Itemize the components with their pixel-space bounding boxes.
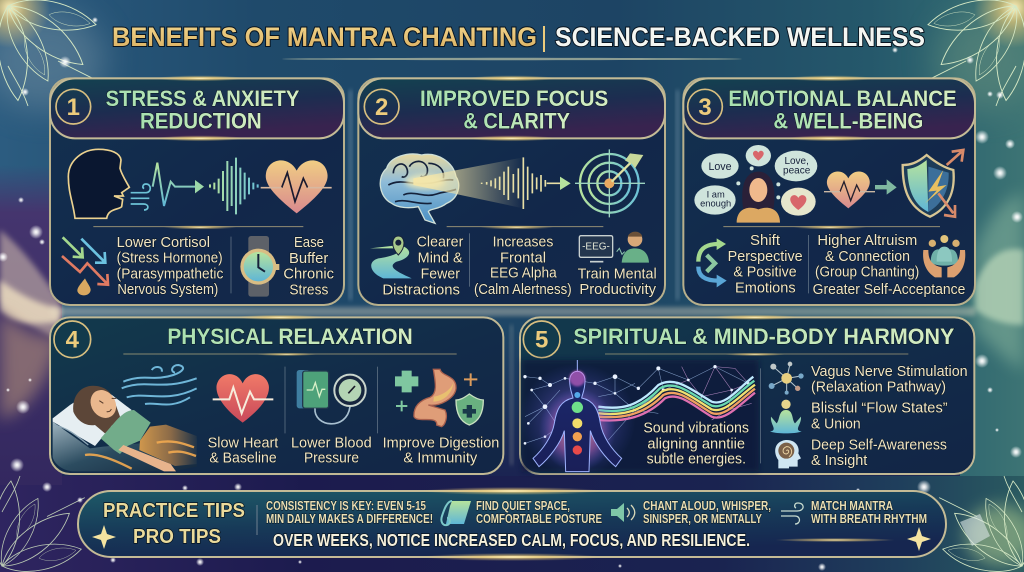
- icon: brain: [380, 154, 459, 223]
- panel 1: stress and anxiety reduction: [50, 75, 344, 305]
- badge: 4: [54, 321, 91, 358]
- tip: match mantra: WITH BREATH RHYTHM: [811, 511, 927, 526]
- caption: sound vibrations: subtle energies.: [647, 450, 746, 467]
- header: stress and anxiety reduction: [50, 75, 344, 141]
- text: increases frontal EEG alpha: (Calm Alertness): [474, 281, 572, 298]
- text: deep self-awareness: [811, 436, 947, 469]
- text: clearer mind: Mind &: [418, 250, 463, 267]
- icon: speaker: [611, 503, 635, 522]
- illustration: energy network: [519, 360, 758, 477]
- icon: breeze waves: [122, 365, 197, 405]
- decorative mandala: top left: [0, 0, 100, 106]
- icon: heart with pulse: [261, 160, 332, 213]
- text: shift perspective: Perspective: [728, 248, 803, 265]
- icon: meditating figure: [770, 400, 802, 433]
- text: increases frontal EEG alpha: Frontal: [500, 249, 546, 266]
- text: clearer mind: Distractions: [382, 281, 460, 298]
- text: lower cortisol: Lower Cortisol: [117, 234, 210, 251]
- panel: practice tips: [78, 487, 946, 561]
- caption: sound vibrations: [643, 420, 749, 467]
- icon: thought clouds: Love: [708, 161, 732, 173]
- heading: practice tips and pro tips: PRACTICE TIPS: [103, 500, 245, 522]
- panel 3: emotional balance and well-being: [683, 75, 975, 305]
- header: improved focus and clarity: 2: [375, 94, 388, 121]
- text: lower blood pressure: Pressure: [304, 450, 359, 467]
- text: vagus nerve stimulation: [811, 363, 968, 396]
- text: improve digestion and immunity: & Immunity: [403, 450, 478, 467]
- text: ease buffer chronic stress: Stress: [289, 281, 328, 298]
- header: improved focus and clarity: & CLARITY: [463, 108, 570, 133]
- tip: consistency: CONSISTENCY IS KEY: EVEN 5-15: [266, 498, 426, 513]
- header: emotional balance and well-being: EMOTIONAL BALANCE: [728, 86, 957, 111]
- badge: 5: 5: [535, 327, 548, 354]
- icon: descending arrows and cortisol drop: [62, 237, 108, 295]
- icon: digestion and immunity: [395, 369, 483, 427]
- icon: sound wave: [210, 158, 258, 214]
- text: deep self-awareness: Deep Self-Awareness: [811, 436, 947, 453]
- icon: yoga mat: [441, 501, 471, 525]
- icon: left sparkle: [92, 525, 116, 549]
- text: slow heart and baseline: Slow Heart: [208, 434, 279, 451]
- tip: quiet space: COMFORTABLE POSTURE: [476, 511, 602, 526]
- icon: EEG monitor: [579, 236, 613, 262]
- tip: consistency: [266, 498, 433, 526]
- text: blissful flow states: Blissful “Flow States”: [811, 400, 948, 417]
- icon: arrow: [875, 179, 897, 195]
- icon: focus beam: [405, 157, 523, 208]
- icon: breath wind: [781, 503, 803, 524]
- text: lower blood pressure: Lower Blood: [291, 434, 372, 451]
- icon: breath wind lines: [131, 184, 150, 210]
- header: stress and anxiety reduction: STRESS & ANXIETY: [106, 86, 300, 111]
- text: clearer mind: [382, 234, 463, 298]
- header: improved focus and clarity: [358, 75, 665, 141]
- icon: winding road with pin: [370, 236, 412, 278]
- text: shift perspective: & Positive: [733, 264, 797, 281]
- closing statement: OVER WEEKS, NOTICE INCREASED CALM, FOCUS, AND RESILIENCE.: [273, 530, 750, 550]
- text: blissful flow states: & Union: [811, 415, 861, 432]
- icon: thought clouds: enough: [700, 199, 731, 209]
- tip: consistency: MIN DAILY MAKES A DIFFERENCE!: [266, 511, 433, 526]
- text: shift perspective: Shift: [750, 232, 781, 249]
- icon: thought clouds: peace: [783, 165, 811, 176]
- heading: practice tips and pro tips: PRO TIPS: [133, 526, 221, 548]
- text: blissful flow states: [811, 400, 948, 432]
- icon: thought clouds: [694, 145, 817, 216]
- header: improved focus and clarity: IMPROVED FOCUS: [420, 86, 608, 111]
- text: higher altruism: Greater Self-Acceptance: [813, 281, 965, 298]
- text: higher altruism: & Connection: [825, 248, 910, 265]
- text: clearer mind: Clearer: [417, 234, 463, 251]
- heading: spiritual and mind-body harmony: SPIRITUAL & MIND-BODY HARMONY: [573, 324, 955, 349]
- text: slow heart and baseline: [208, 434, 279, 467]
- heading: practice tips and pro tips: [103, 500, 245, 548]
- text: vagus nerve stimulation: (Relaxation Pathway): [811, 379, 946, 396]
- icon: alpha wave: [482, 157, 563, 209]
- panel 2: improved focus and clarity: [358, 75, 665, 305]
- heading: physical relaxation: PHYSICAL RELAXATION: [167, 324, 413, 349]
- title: BENEFITS OF MANTRA CHANTING: [112, 22, 537, 52]
- tip: quiet space: [476, 498, 602, 526]
- text: increases frontal EEG alpha: Increases: [493, 234, 553, 251]
- text: lower cortisol: [117, 234, 224, 298]
- panel 4: physical relaxation: [50, 315, 503, 474]
- text: ease buffer chronic stress: Buffer: [289, 250, 328, 267]
- icon: blood pressure monitor: [297, 370, 366, 424]
- text: lower cortisol: (Parasympathetic: [117, 266, 224, 283]
- decorative mandala: bottom left: [0, 476, 85, 572]
- icon: thought clouds: Love,: [784, 156, 809, 167]
- tip: chant aloud: [643, 498, 771, 526]
- text: vagus nerve stimulation: Vagus Nerve Stimulation: [811, 363, 968, 380]
- icon: target: [575, 149, 645, 217]
- icon: shifting arrows: [698, 238, 727, 287]
- icon: vagus nerve nodes: [769, 362, 804, 395]
- tip: match mantra: [811, 498, 927, 526]
- text: lower cortisol: Nervous System): [117, 281, 218, 298]
- icon: heart rate: [213, 374, 273, 423]
- text: deep self-awareness: & Insight: [811, 452, 868, 469]
- text: ease buffer chronic stress: Chronic: [283, 266, 334, 283]
- icon: cracked shield: [903, 150, 963, 217]
- text: slow heart and baseline: & Baseline: [209, 450, 277, 467]
- badge: 4: 4: [66, 327, 80, 354]
- icon: head with spiral: [775, 440, 801, 468]
- header: emotional balance and well-being: [683, 75, 975, 141]
- title: SCIENCE-BACKED WELLNESS: [555, 22, 925, 52]
- panel 5: spiritual and mind-body harmony: [519, 315, 974, 477]
- text: improve digestion and immunity: [383, 434, 499, 467]
- text: increases frontal EEG alpha: EEG Alpha: [490, 264, 557, 281]
- text: shift perspective: [728, 232, 803, 297]
- text: train mental productivity: Train Mental: [578, 265, 657, 282]
- text: ease buffer chronic stress: Ease: [294, 234, 324, 251]
- icon: watch: [240, 236, 279, 297]
- waves: rainbow energy: [598, 377, 755, 421]
- icon: right sparkle: [907, 527, 931, 551]
- text: train mental productivity: Productivity: [579, 281, 656, 298]
- badge: 5: [523, 321, 560, 358]
- header: emotional balance and well-being: 3: [698, 94, 712, 121]
- caption: sound vibrations: Sound vibrations: [643, 420, 749, 437]
- text: clearer mind: Fewer: [421, 266, 460, 283]
- icon: sleeping woman: [53, 385, 197, 471]
- text: higher altruism: Higher Altruism: [817, 232, 917, 249]
- tip: chant aloud: SINISPER, OR MENTALLY: [643, 511, 762, 526]
- title: [112, 22, 925, 60]
- icon: woman: [737, 172, 780, 223]
- icon: chanting head: [68, 149, 129, 218]
- header: stress and anxiety reduction: REDUCTION: [140, 108, 262, 133]
- illustration: chakra figure: [533, 360, 622, 472]
- icon: EEG monitor: -EEG-: [582, 241, 610, 252]
- icon: thought clouds: I am: [707, 189, 725, 199]
- text: shift perspective: Emotions: [735, 280, 796, 297]
- icon: arrow to target: [560, 177, 571, 190]
- tip: quiet space: FIND QUIET SPACE,: [476, 498, 570, 513]
- text: lower cortisol: (Stress Hormone): [117, 249, 223, 266]
- icon: balanced heart: [824, 172, 875, 208]
- icon: pulse arrow: [153, 163, 204, 206]
- decorative mandala: top right: [924, 0, 1024, 106]
- caption: sound vibrations: aligning anntiie: [647, 435, 745, 452]
- decorative mandala: bottom right: [939, 476, 1024, 572]
- icon: person: [617, 232, 649, 263]
- tip: match mantra: MATCH MANTRA: [811, 498, 893, 513]
- text: improve digestion and immunity: Improve Digestion: [383, 434, 499, 451]
- icon: hands holding group: [923, 235, 965, 277]
- tip: chant aloud: CHANT ALOUD, WHISPER,: [643, 498, 771, 513]
- header: emotional balance and well-being: & WELL-BEING: [773, 108, 923, 133]
- text: higher altruism: (Group Chanting): [815, 264, 919, 281]
- text: higher altruism: [813, 232, 965, 298]
- text: train mental productivity: [578, 265, 657, 298]
- text: ease buffer chronic stress: [283, 234, 334, 298]
- text: lower blood pressure: [291, 434, 372, 467]
- header: stress and anxiety reduction: 1: [67, 94, 80, 121]
- text: increases frontal EEG alpha: [474, 234, 572, 298]
